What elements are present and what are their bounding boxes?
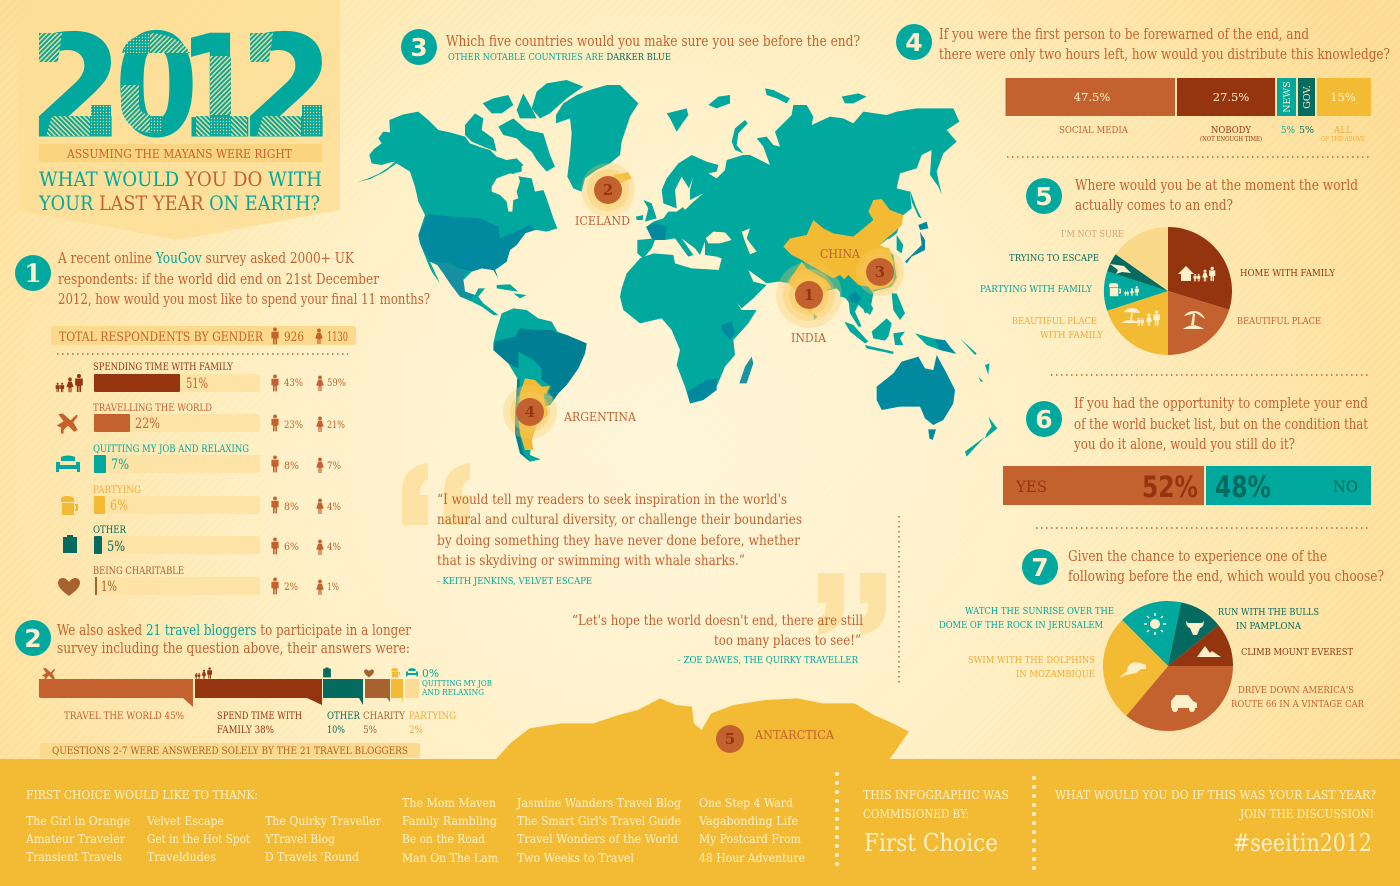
section 3 heading: Which five countries would you make sure you see before the end? [446, 34, 860, 50]
hatch texture across the digits [39, 33, 322, 136]
respondents by gender band: 1130 [327, 330, 348, 345]
quote 2: too many places to see!” [714, 633, 861, 649]
stacked bar: distribution: (NOT ENOUGH TIME) [1200, 136, 1262, 143]
pie labels: IN PAMPLONA [1236, 621, 1301, 632]
thanks list: My Postcard From [699, 831, 801, 846]
call to action [1055, 788, 1376, 857]
map marker 2: Iceland [575, 163, 635, 228]
africa, south-east asia and oceania [620, 253, 997, 457]
stacked bar: distribution: NEWS [1282, 81, 1293, 113]
footer [0, 759, 1400, 886]
note band: QUESTIONS 2-7 WERE ANSWERED SOLELY BY THE 21 TRAVEL BLOGGERS [52, 746, 408, 757]
pie labels: IN MOZAMBIQUE [1016, 669, 1095, 680]
row: family: 59% [327, 378, 346, 389]
thanks list: Transient Travels [26, 849, 122, 864]
map marker 1: India: INDIA [791, 331, 826, 345]
antarctica [496, 698, 909, 759]
section 5 [980, 178, 1358, 355]
call to action: WHAT WOULD YOU DO IF THIS WAS YOUR LAST YEAR? [1055, 788, 1376, 802]
subtitle band: ASSUMING THE MAYANS WERE RIGHT [66, 146, 293, 161]
antarctica: ANTARCTICA [754, 728, 834, 742]
section 7: Given the chance to experience one of the [1068, 549, 1327, 565]
row: travelling [57, 403, 345, 434]
yes/no bar: NO [1333, 477, 1358, 496]
thanks list: The Mom Maven [402, 795, 496, 810]
pie labels: BEAUTIFUL PLACE [1012, 316, 1097, 327]
row: partying: 6% [110, 498, 128, 514]
thanks list: The Girl in Orange [26, 813, 130, 828]
yes/no bar: 48% [1215, 470, 1271, 504]
stacked bar: travel bloggers: SPEND TIME WITH [217, 711, 302, 722]
map marker 3: China: 3 [875, 263, 885, 281]
map marker 2: Iceland: 2 [603, 181, 613, 199]
quote 1: by doing something they have never done before, whether [437, 533, 800, 549]
note band [40, 743, 420, 758]
row: quitting [56, 444, 341, 473]
pie labels: SWIM WITH THE DOLPHINS [968, 655, 1095, 666]
quote 1 [402, 463, 802, 587]
thanks list: Two Weeks to Travel [517, 850, 634, 865]
badge 5 [1026, 178, 1062, 214]
thanks list: Man On The Lam [402, 850, 498, 865]
map marker 3: China: CHINA [820, 247, 860, 261]
badge 6 [1026, 401, 1062, 437]
badge 7 [1022, 549, 1058, 585]
quote 2: “Let's hope the world doesn't end, there are still [572, 613, 863, 629]
map marker 4: Argentina [503, 385, 636, 439]
section 3 heading [401, 29, 860, 65]
badge 2 [15, 620, 51, 656]
yes/no bar: 52% [1142, 470, 1198, 504]
stacked bar: travel bloggers: AND RELAXING [421, 688, 484, 698]
section 4: If you were the first person to be forewarned of the end, and [939, 27, 1309, 43]
thanks list: Family Rambling [402, 813, 497, 828]
quote 2: - ZOE DAWES, THE QUIRKY TRAVELLER [678, 655, 859, 666]
badge 3: 3 [410, 33, 428, 62]
row: family [56, 362, 346, 392]
row: travelling: TRAVELLING THE WORLD [93, 403, 212, 414]
row: family: SPENDING TIME WITH FAMILY [93, 362, 233, 373]
badge 6: 6 [1035, 405, 1053, 434]
quote 1: - KEITH JENKINS, VELVET ESCAPE [437, 576, 592, 587]
map marker 1: India: 1 [804, 286, 814, 304]
row: charity: BEING CHARITABLE [93, 566, 184, 577]
opening quote mark [402, 463, 470, 525]
stacked bar: distribution: 5% [1299, 125, 1314, 136]
thanks list: Jasmine Wanders Travel Blog [515, 795, 681, 810]
stacked bar: distribution: GOV. [1302, 85, 1313, 109]
section 2 text: survey including the question above, their answers were: [57, 641, 410, 657]
thanks list: Velvet Escape [146, 813, 224, 828]
stacked bar: distribution: OF THE ABOVE [1321, 136, 1365, 143]
section 2 text [57, 623, 411, 657]
row: travelling: 23% [284, 420, 303, 431]
pie labels: HOME WITH FAMILY [1240, 268, 1336, 279]
row: charity: 1% [101, 579, 117, 595]
call to action: #seeitin2012 [1233, 829, 1372, 857]
south america [493, 308, 587, 462]
row: partying: 4% [327, 502, 341, 513]
quote 1: that is skydiving or swimming with whale sharks.” [437, 553, 745, 569]
row: charity [58, 566, 339, 596]
icons in pie [1109, 264, 1215, 329]
badge 3 [401, 29, 437, 65]
call to action: JOIN THE DISCUSSION! [1238, 807, 1374, 821]
commission credit: COMMISIONED BY: [863, 807, 969, 821]
row: other: 5% [107, 539, 125, 555]
thanks list: Amateur Traveler [25, 831, 125, 846]
stacked bar: travel bloggers: 0% [422, 667, 439, 680]
marker 5: 5 [725, 730, 735, 748]
pie labels: RUN WITH THE BULLS [1218, 607, 1319, 618]
heading: 2012 [29, 4, 334, 170]
section 3 heading: OTHER NOTABLE COUNTRIES ARE DARKER BLUE [448, 52, 671, 63]
stacked bar: distribution [1006, 78, 1371, 143]
row: travelling: 21% [327, 420, 345, 431]
title panel [18, 0, 340, 240]
quote 1: “I would tell my readers to seek inspiration in the world's [437, 492, 787, 508]
map marker 4: Argentina: 4 [525, 403, 535, 421]
row: travelling: 22% [135, 416, 160, 432]
row: quitting: QUITTING MY JOB AND RELAXING [93, 444, 249, 455]
row: charity: 1% [327, 582, 339, 593]
row: other [63, 525, 341, 555]
heading: 2012: 2 [240, 5, 334, 170]
row: partying: 8% [284, 502, 299, 513]
pie labels: DRIVE DOWN AMERICA'S [1238, 685, 1354, 696]
stacked bar: distribution: 47.5% [1074, 90, 1110, 104]
intro text: respondents: if the world did end on 21st December [58, 272, 379, 288]
badge 2: 2 [24, 624, 42, 653]
stacked bar: distribution: 5% [1281, 125, 1295, 136]
map marker 4: Argentina: ARGENTINA [563, 410, 636, 424]
thanks list: Get in the Hot Spot [147, 831, 250, 846]
thanks list: YTravel Blog [264, 831, 335, 846]
section 1 intro [15, 251, 430, 308]
bar chart: final 11 months [56, 362, 346, 596]
respondents by gender band [51, 326, 356, 345]
pie chart: experiences [1103, 601, 1233, 731]
pie labels: DOME OF THE ROCK IN JERUSALEM [939, 620, 1103, 631]
yes/no bar: YES [1015, 477, 1047, 496]
stacked bar: travel bloggers: PARTYING [409, 711, 456, 722]
badge 7: 7 [1031, 553, 1049, 582]
stacked bar: distribution: SOCIAL MEDIA [1059, 125, 1128, 136]
pie labels: CLIMB MOUNT EVEREST [1241, 647, 1354, 658]
section 6 [1003, 396, 1371, 505]
stacked bar: distribution: 27.5% [1213, 90, 1249, 104]
pie labels: TRYING TO ESCAPE [1009, 253, 1099, 264]
badge 1: 1 [24, 259, 42, 288]
section 6: you do it alone, would you still do it? [1073, 437, 1295, 453]
eurasia [613, 88, 959, 315]
thanks list: The Smart Girl's Travel Guide [517, 813, 681, 828]
badge 4 [896, 24, 932, 60]
pie chart: where [1104, 227, 1232, 355]
heading: 2012: 1 [179, 6, 256, 169]
intro text [57, 251, 430, 308]
stacked bar: travel bloggers: 2% [409, 725, 423, 736]
map marker 2: Iceland: ICELAND [575, 214, 630, 228]
row: partying: PARTYING [93, 485, 141, 496]
badge 1 [15, 255, 51, 291]
thanks list: Be on the Road [402, 831, 485, 846]
stacked bar: travel bloggers: QUITTING MY JOB [422, 679, 492, 689]
title question: YOUR LAST YEAR ON EARTH? [38, 191, 320, 215]
commission credit [863, 788, 1009, 857]
pie labels [980, 229, 1336, 341]
respondents by gender band: TOTAL RESPONDENTS BY GENDER [59, 330, 264, 345]
north america and greenland [357, 80, 638, 315]
title question: WHAT WOULD YOU DO WITH [39, 167, 322, 191]
pie labels: ROUTE 66 IN A VINTAGE CAR [1231, 699, 1365, 710]
section 4 [896, 24, 1390, 143]
stacked bar: travel bloggers: FAMILY 38% [217, 725, 274, 736]
thanks list [25, 795, 805, 865]
row: quitting: 7% [327, 461, 341, 472]
section 7 [939, 549, 1384, 731]
title question [38, 167, 322, 215]
stacked bar: travel bloggers: 10% [327, 725, 345, 736]
pie labels: WATCH THE SUNRISE OVER THE [965, 606, 1114, 617]
stacked bar: travel bloggers: CHARITY [363, 711, 405, 722]
stacked bar: distribution: ALL [1333, 125, 1353, 136]
thanks list: Vagabonding Life [698, 813, 798, 828]
thanks list: Traveldudes [147, 849, 216, 864]
row: other: 6% [284, 542, 299, 553]
badge 5: 5 [1035, 182, 1053, 211]
stacked bar: travel bloggers: 5% [363, 725, 377, 736]
row: quitting: 8% [284, 461, 299, 472]
badge 4: 4 [905, 28, 923, 57]
heading: 2012: 0 [115, 4, 198, 168]
stacked bar: travel bloggers [39, 667, 492, 736]
thanks list: Travel Wonders of the World [517, 831, 678, 846]
pie labels: PARTYING WITH FAMILY [980, 284, 1093, 295]
section 5: actually comes to an end? [1075, 198, 1233, 214]
row: family: 43% [284, 378, 303, 389]
quote 1: natural and cultural diversity, or challenge their boundaries [437, 512, 802, 528]
thanks list: D Travels 'Round [265, 849, 359, 864]
world map [357, 80, 997, 462]
section 2 text: We also asked 21 travel bloggers to participate in a longer [57, 623, 411, 639]
map marker 1: India [776, 262, 842, 345]
yes/no bar [1003, 466, 1371, 505]
small icons above the bar [42, 667, 418, 681]
stacked bar: travel bloggers: OTHER [327, 711, 360, 722]
section 2 intro [15, 620, 411, 657]
pie labels: I'M NOT SURE [1061, 229, 1124, 240]
row: partying [61, 485, 341, 515]
pie labels [939, 606, 1365, 710]
thanks list: One Step 4 Ward [699, 795, 793, 810]
thanks list: 48 Hour Adventure [699, 850, 805, 865]
marker 5 [716, 725, 744, 753]
respondents by gender band: 926 [284, 330, 304, 345]
row: charity: 2% [284, 582, 298, 593]
quote 2 [572, 573, 886, 666]
heading: 2012: 2 [29, 5, 123, 170]
stacked bar: travel bloggers: TRAVEL THE WORLD 45% [64, 711, 184, 722]
pie labels: BEAUTIFUL PLACE [1237, 316, 1321, 327]
stacked bar: distribution: 15% [1330, 90, 1356, 104]
commission credit: First Choice [864, 829, 998, 857]
closing quote mark [818, 573, 886, 635]
row: quitting: 7% [111, 457, 129, 473]
intro text: 2012, how would you most like to spend your final 11 months? [58, 292, 430, 308]
icons in pie [1119, 613, 1221, 712]
stacked bar: distribution: NOBODY [1211, 125, 1252, 136]
row: family: 51% [186, 376, 208, 392]
intro text: A recent online YouGov survey asked 2000+ UK [57, 251, 355, 267]
row: other: OTHER [93, 525, 126, 536]
pie labels: WITH FAMILY [1040, 330, 1104, 341]
map marker 3: China [820, 247, 904, 296]
commission credit: THIS INFOGRAPHIC WAS [863, 788, 1009, 802]
thanks heading: FIRST CHOICE WOULD LIKE TO THANK: [26, 788, 258, 802]
thanks list: The Quirky Traveller [265, 813, 381, 828]
row: other: 4% [327, 542, 341, 553]
